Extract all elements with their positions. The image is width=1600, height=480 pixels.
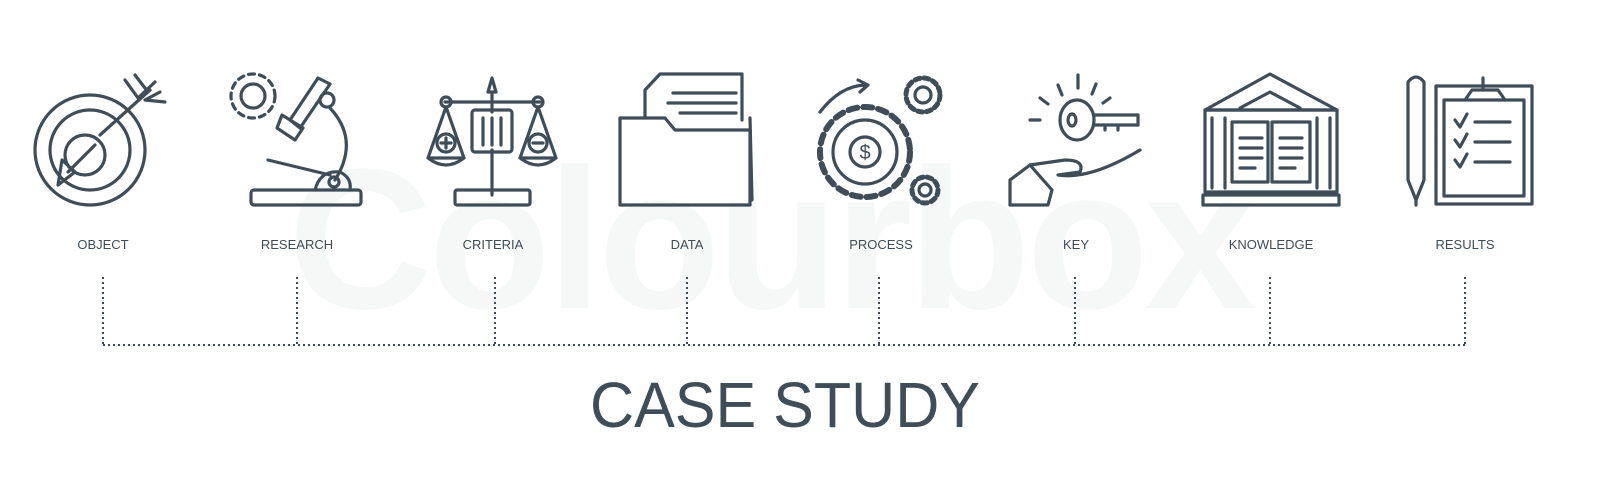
labels: RESEARCH: [261, 237, 333, 252]
labels: KEY: [1063, 237, 1089, 252]
labels: OBJECT: [77, 237, 129, 252]
icon: object target: [35, 75, 165, 205]
icon: key hand: [1010, 75, 1140, 205]
icon: process gears: $: [859, 142, 871, 164]
labels: PROCESS: [849, 237, 913, 252]
labels: RESULTS: [1436, 237, 1495, 252]
connector dotted lines: [103, 277, 1465, 345]
icon: data folder: [620, 74, 752, 205]
icon: results clipboard: [1408, 77, 1532, 205]
title: CASE STUDY: [590, 369, 980, 441]
labels: CRITERIA: [463, 237, 524, 252]
icon: process gears: [820, 78, 940, 203]
labels: [77, 237, 1495, 252]
icon: knowledge building: [1203, 74, 1339, 205]
labels: DATA: [671, 237, 704, 252]
watermark: Colourbox: [288, 128, 1255, 351]
icon: research microscope: [231, 74, 361, 205]
icon: criteria scales: [428, 78, 556, 205]
labels: KNOWLEDGE: [1229, 237, 1314, 252]
